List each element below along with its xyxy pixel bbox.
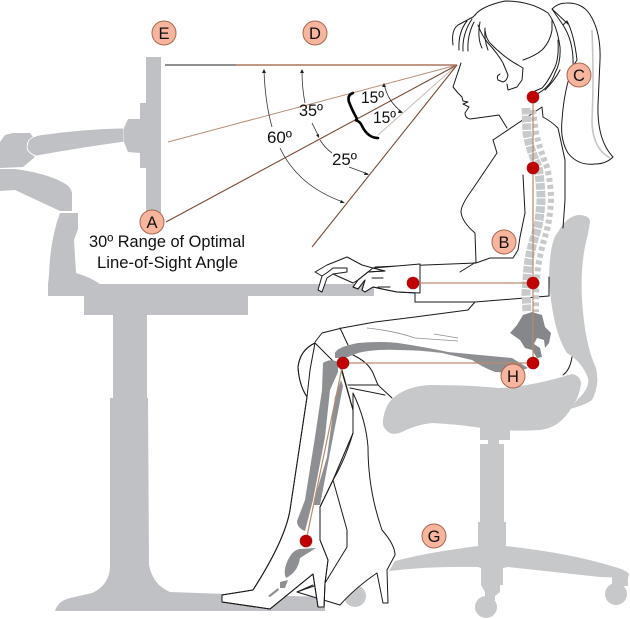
pelvis (510, 312, 551, 358)
brace (348, 93, 378, 138)
label G: G (428, 528, 440, 546)
angle labels: 15º (361, 89, 384, 107)
chair column collar (480, 425, 510, 445)
label E: E (158, 25, 170, 43)
body alignment lines (306, 97, 533, 541)
torso (493, 107, 565, 228)
chair casters (344, 585, 366, 607)
monitor arm and stand (0, 128, 124, 284)
femur (335, 342, 528, 373)
label H: H (507, 368, 519, 386)
angle labels: 15º (373, 109, 396, 127)
label A: A (146, 214, 158, 232)
foot bones (268, 548, 316, 597)
chair base (389, 444, 629, 600)
caption (89, 232, 245, 272)
label D: D (309, 25, 321, 43)
angle labels: 35º (299, 102, 323, 120)
label C (567, 63, 591, 87)
tibia (297, 360, 338, 531)
woman figure (222, 1, 613, 609)
fibula (314, 380, 343, 505)
label G (422, 524, 446, 548)
upper arm (375, 175, 525, 267)
ponytail (552, 3, 613, 164)
sight lines (165, 65, 457, 247)
label B (492, 230, 516, 254)
label C: C (573, 67, 585, 85)
front hand (353, 264, 420, 293)
angle arcs (262, 69, 403, 203)
caption: 30º Range of Optimal (89, 232, 245, 251)
near boot (222, 343, 353, 609)
angle labels: 25º (332, 151, 357, 169)
lap and skirt (315, 310, 468, 342)
label D (303, 21, 327, 45)
chair seat (383, 374, 581, 434)
desk (48, 284, 374, 611)
label B: B (498, 234, 510, 252)
far boot (297, 393, 395, 605)
label A (140, 210, 164, 234)
label H (501, 364, 525, 388)
back hand (315, 257, 373, 292)
monitor (124, 57, 161, 217)
joint markers (300, 91, 539, 547)
head and hair (475, 1, 560, 95)
chair backrest (549, 215, 597, 409)
spine (526, 108, 551, 312)
office chair (344, 215, 629, 618)
label E (152, 21, 176, 45)
angle labels (267, 89, 396, 169)
caption: Line-of-Sight Angle (97, 253, 238, 272)
angle labels: 60º (267, 129, 292, 147)
